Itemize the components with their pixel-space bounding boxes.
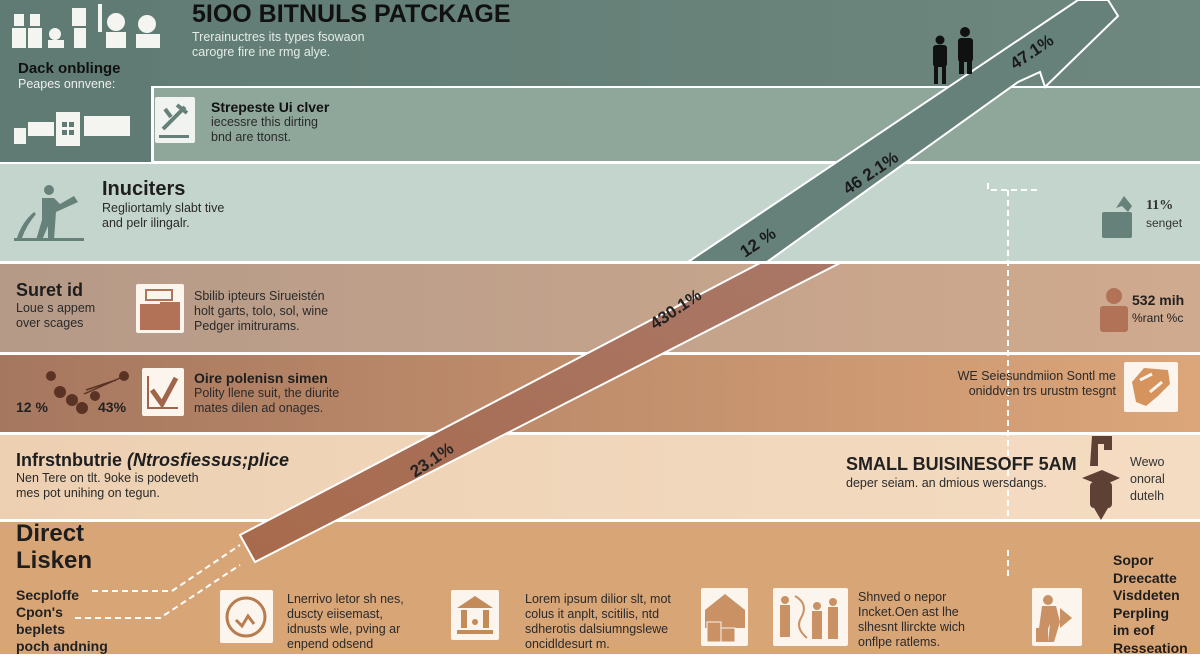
text: duscty eiisemast, — [287, 607, 383, 621]
panel: SMALL BUISINESOFF 5AM: Wewo — [1130, 455, 1165, 469]
text: Dack onblinge — [18, 60, 121, 91]
text: Sopor list: Perpling — [1113, 604, 1169, 620]
panel: SMALL BUISINESOFF 5AM: dutelh — [1130, 489, 1164, 503]
panel: SMALL BUISINESOFF 5AM: onoral — [1130, 472, 1165, 486]
icon: buildings — [14, 112, 130, 146]
icon: people silhouettes — [933, 27, 973, 84]
label: 430.1%: 430.1% — [647, 285, 705, 333]
panel: SMALL BUISINESOFF 5AM: SMALL BUISINESOFF 5AM — [846, 454, 1077, 474]
panel: SMALL BUISINESOFF 5AM — [846, 436, 1165, 520]
chart: dots — [16, 371, 129, 415]
text: Secploffe list — [16, 587, 108, 654]
text: sdherotis dalsiumngslewe — [525, 622, 668, 636]
text: Secploffe list: poch andning — [16, 638, 108, 654]
text — [211, 99, 330, 144]
title: 5IOO BITNULS PATCKAGE — [192, 0, 511, 28]
text: Pedger imitrurams. — [194, 319, 300, 333]
text: Sopor list: Resseation — [1113, 640, 1188, 656]
text: Secploffe list: beplets — [16, 621, 65, 637]
heading: Direct Lisken: Direct — [16, 520, 84, 547]
text: colus it anplt, scitilis, ntd — [525, 607, 659, 621]
text — [194, 289, 328, 333]
icon: people — [773, 588, 848, 646]
icon: person — [1100, 288, 1128, 332]
text: Sopor list: Dreecatte — [1113, 570, 1177, 586]
subtitle: carogre fire ine rmg alye. — [192, 45, 330, 59]
text: Incket.Oen ast lhe — [858, 605, 959, 619]
panel: Infrstnbutrie: Nen Tere on tlt. 9oke is podeveth — [16, 471, 199, 485]
text: Strepeste Ui clver — [211, 99, 329, 115]
text: Loue s appem — [16, 301, 95, 315]
subtitle — [192, 30, 365, 59]
text: Inuciters — [102, 178, 185, 200]
panel: bottom icon row — [220, 588, 1082, 651]
chart: dots: 43% — [98, 399, 127, 415]
heading: Direct Lisken: Lisken — [16, 547, 92, 574]
panel: Infrstnbutrie — [16, 450, 289, 500]
label: 46 2.1%: 46 2.1% — [840, 148, 902, 198]
text: Sopor list: Visddeten — [1113, 587, 1180, 603]
callout: 11% senget — [1102, 196, 1182, 238]
icon: chart check — [142, 368, 184, 416]
icon: bags — [136, 284, 184, 333]
icon: person with arrow — [1032, 588, 1082, 646]
icon: key lock — [1082, 436, 1120, 520]
text: Dack onblinge: Dack onblinge — [18, 60, 121, 77]
text: Sbilib ipteurs Sirueistén — [194, 289, 325, 303]
callout: We Seesund: oniddven trs urustm tesgnt — [969, 384, 1116, 398]
text: iecessre this dirting — [211, 115, 318, 129]
callout: 11% senget: senget — [1146, 216, 1182, 230]
label: 23.1%: 23.1% — [407, 439, 457, 481]
text: Secploffe list: Secploffe — [16, 587, 79, 603]
text: Lorem ipsum dilior slt, mot — [525, 592, 671, 606]
text — [287, 592, 404, 651]
panel: Infrstnbutrie: Infrstnbutrie (Ntrosfiessus;plice — [16, 450, 289, 470]
text: mates dilen ad onages. — [194, 401, 323, 415]
panel: Infrstnbutrie: mes pot unihing on tegun. — [16, 486, 160, 500]
icon: tool — [155, 97, 195, 143]
text: holt garts, tolo, sol, wine — [194, 304, 328, 318]
text: Polity llene suit, the diurite — [194, 386, 339, 400]
text: oncidldesurt m. — [525, 637, 610, 651]
subtitle: Trerainuctres its types fsowaon — [192, 30, 365, 44]
text: Dack onblinge: Peapes onnvene: — [18, 77, 115, 91]
text: Lnerrivo letor sh nes, — [287, 592, 404, 606]
panel: 12% 43% dots — [16, 368, 339, 416]
text: Sopor list: Sopor — [1113, 552, 1153, 568]
icon: person pushing — [14, 185, 84, 241]
panel: SMALL BUISINESOFF 5AM: deper seiam. an dmious wersdangs. — [846, 476, 1047, 490]
heading: Direct Lisken — [16, 520, 92, 574]
text: bnd are ttonst. — [211, 130, 291, 144]
text: Suret id — [16, 280, 83, 300]
callout: 532 mih — [1100, 288, 1184, 332]
icon: group of people top-left — [12, 4, 160, 48]
chart: dots: 12 % — [16, 399, 48, 415]
text: Shnved o nepor — [858, 590, 946, 604]
callout: 532 mih: 532 mih — [1132, 292, 1184, 308]
text: idnusts wle, pving ar — [287, 622, 400, 636]
text — [102, 178, 224, 230]
icon: briefcase — [1102, 196, 1132, 238]
label: 47.1%: 47.1% — [1007, 31, 1057, 73]
text: Secploffe list: Cpon's — [16, 604, 63, 620]
text: onflpe ratlems. — [858, 635, 940, 649]
panel: Strepeste icon and text — [155, 97, 330, 144]
text: and pelr ilingalr. — [102, 216, 190, 230]
callout: 11% senget: 11% — [1146, 198, 1173, 213]
text: Sopor list — [1113, 552, 1188, 656]
icon: house boxes — [701, 588, 748, 646]
callout: We Seesund — [958, 362, 1178, 412]
text: over scages — [16, 316, 83, 330]
callout: 532 mih: %rant %c — [1132, 311, 1183, 325]
icon: puzzle — [1124, 362, 1178, 412]
text: enpend odsend — [287, 637, 373, 651]
icon: circle swirl — [220, 590, 273, 643]
text: slhesnt llirckte wich — [858, 620, 965, 634]
panel: Suret id — [16, 280, 328, 333]
text: Oire polenisn simen — [194, 370, 328, 386]
callout: We Seesund: WE Seiesundmiion Sontl me — [958, 369, 1116, 383]
text — [858, 590, 965, 649]
text: Regliortamly slabt tive — [102, 201, 224, 215]
text — [525, 592, 671, 651]
panel: Inuciters — [14, 178, 224, 241]
icon: bank — [451, 590, 499, 640]
label: 12%: 12 % — [737, 224, 779, 261]
text — [16, 280, 95, 330]
text — [194, 370, 339, 415]
text: Sopor list: im eof — [1113, 622, 1154, 638]
